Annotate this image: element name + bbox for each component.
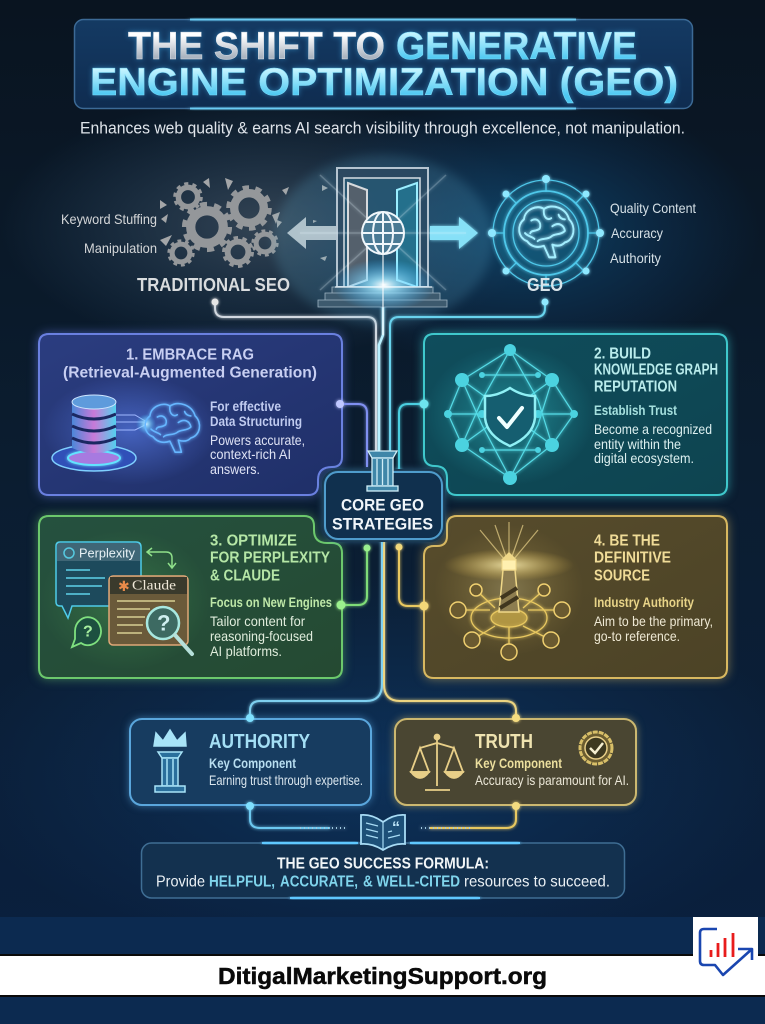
heading: traditional SEO: TRADITIONAL SEO	[137, 275, 290, 295]
panel: 4 definitive source	[424, 516, 727, 678]
text: panel 1 body: For effective	[210, 398, 281, 414]
title text: ENGINE OPTIMIZATION (GEO)	[90, 61, 678, 104]
icon: question bubble	[72, 617, 101, 647]
text: panel 3 body: Focus on New Engines	[210, 594, 332, 610]
icon: database and brain	[52, 395, 200, 471]
arrow: right to GEO	[430, 217, 478, 249]
heading: panel 3: FOR PERPLEXITY	[210, 550, 330, 566]
panel: 2 knowledge graph	[424, 334, 727, 495]
text: panel 3 body: Tailor content for	[210, 613, 305, 629]
text: panel 4 body: Industry Authority	[594, 594, 694, 610]
text: panel 1 body: context-rich AI	[210, 446, 291, 462]
text: authority	[209, 731, 363, 788]
label: core GEO strategies: CORE GEO	[341, 496, 424, 514]
text: panel 2 body: digital ecosystem.	[594, 450, 694, 466]
subtitle: Enhances web quality & earns AI search visibility through excellence, not manipulation.	[80, 118, 685, 138]
text: formula line: Provide	[156, 874, 205, 890]
icon: gateway door	[273, 155, 493, 335]
icon: Perplexity chat bubble: Perplexity	[79, 546, 135, 560]
footer band	[0, 917, 765, 1024]
connectors: panels to centre	[336, 400, 428, 610]
heading: panel 4: 4. BE THE	[594, 532, 660, 550]
text: panel 1 body: Data Structuring	[210, 413, 302, 429]
text: truth	[475, 731, 629, 788]
panel: GEO success formula	[142, 842, 624, 899]
icon: scales	[411, 734, 463, 790]
icon: Claude card with magnifier: ✱	[118, 578, 130, 594]
heading: panel 4	[594, 532, 671, 584]
panel: truth	[395, 714, 636, 810]
icon: question bubble: ?	[83, 624, 93, 640]
panel: 1 embrace RAG	[39, 334, 342, 495]
icon: lighthouse network	[434, 522, 584, 660]
icon: pillar	[367, 451, 398, 491]
icon: Perplexity chat bubble	[56, 542, 141, 618]
footer site name: DitigalMarketingSupport.org	[218, 963, 547, 989]
text: authority: Earning trust through expertise.	[209, 772, 363, 788]
text: formula line: HELPFUL,	[209, 874, 275, 890]
title text: THE SHIFT TO	[128, 25, 385, 68]
text: panel 1 body	[210, 398, 305, 477]
GEO: labels: Accuracy	[611, 225, 663, 241]
text: panel 2 body: Establish Trust	[594, 402, 677, 418]
text: authority: AUTHORITY	[209, 731, 311, 753]
icon: Claude card with magnifier	[109, 576, 192, 654]
heading: GEO: GEO	[527, 275, 563, 295]
heading: panel 2: REPUTATION	[594, 378, 677, 396]
text: panel 4 body: go-to reference.	[594, 628, 680, 644]
text: truth: Key Component	[475, 755, 562, 771]
text: panel 2 body: Become a recognized	[594, 421, 712, 437]
traditional SEO: labels: Keyword Stuffing	[61, 211, 157, 227]
heading: panel 2: KNOWLEDGE GRAPH	[594, 362, 718, 378]
icon: open book	[361, 815, 405, 850]
heading: panel 1: (Retrieval-Augmented Generation)	[63, 364, 317, 382]
icon: shield in network	[444, 344, 578, 485]
icon: crown on pillar	[154, 730, 186, 792]
title panel	[74, 18, 692, 110]
GEO: labels	[610, 200, 696, 266]
heading: panel 3	[210, 532, 330, 584]
text: panel 2 body: entity within the	[594, 436, 681, 452]
title text: GENERATIVE	[396, 25, 637, 68]
arrow: left to traditional SEO	[287, 217, 336, 249]
traditional SEO: labels: Manipulation	[84, 240, 157, 256]
connector lines: top and centre trunk	[212, 290, 548, 455]
text: formula line: ACCURATE,	[280, 874, 358, 890]
icon: Claude card with magnifier: Claude	[132, 578, 176, 594]
label: core GEO strategies	[332, 496, 433, 534]
heading: panel 3: & CLAUDE	[210, 568, 280, 584]
text: panel 4 body	[594, 594, 713, 644]
text: formula heading: THE GEO SUCCESS FORMULA:	[277, 856, 489, 872]
icon: GEO brain network	[488, 175, 604, 286]
text: panel 3 body	[210, 594, 332, 659]
icon: globe	[362, 212, 404, 254]
icon: swap arrows	[147, 548, 176, 568]
icon: open book: “	[392, 820, 400, 836]
GEO: labels: Authority	[610, 250, 661, 266]
traditional SEO: labels	[61, 211, 157, 256]
text: authority: Key Component	[209, 755, 296, 771]
heading: panel 2	[594, 346, 718, 396]
heading: panel 1	[63, 346, 317, 382]
logo	[693, 917, 758, 975]
icon: Claude card with magnifier: ?	[157, 610, 170, 636]
heading: panel 4: SOURCE	[594, 568, 650, 584]
text: panel 4 body: Aim to be the primary,	[594, 613, 713, 629]
icon: verified badge	[580, 732, 612, 764]
text: formula line: resources to succeed.	[464, 874, 610, 890]
title text	[90, 25, 678, 104]
heading: panel 4: DEFINITIVE	[594, 550, 671, 566]
text: truth: TRUTH	[475, 731, 533, 753]
text: panel 1 body: Powers accurate,	[210, 432, 305, 448]
panel: 3 optimize for Perplexity and Claude	[39, 516, 342, 678]
connectors: lower split	[250, 538, 516, 828]
label: core GEO strategies: STRATEGIES	[332, 514, 433, 534]
GEO: labels: Quality Content	[610, 200, 696, 216]
text: formula line	[156, 874, 610, 890]
centre box: core GEO strategies	[325, 451, 442, 539]
text: panel 1 body: answers.	[210, 461, 260, 477]
icon: broken gears	[160, 178, 328, 266]
panel: authority	[130, 714, 371, 810]
text: formula line: & WELL-CITED	[363, 874, 460, 890]
heading: panel 2: 2. BUILD	[594, 346, 651, 362]
heading: panel 3: 3. OPTIMIZE	[210, 532, 297, 550]
text: panel 2 body	[594, 402, 712, 466]
text: panel 3 body: AI platforms.	[210, 643, 282, 659]
heading: panel 1: 1. EMBRACE RAG	[126, 346, 254, 364]
text: panel 3 body: reasoning-focused	[210, 628, 313, 644]
text: truth: Accuracy is paramount for AI.	[475, 772, 629, 788]
